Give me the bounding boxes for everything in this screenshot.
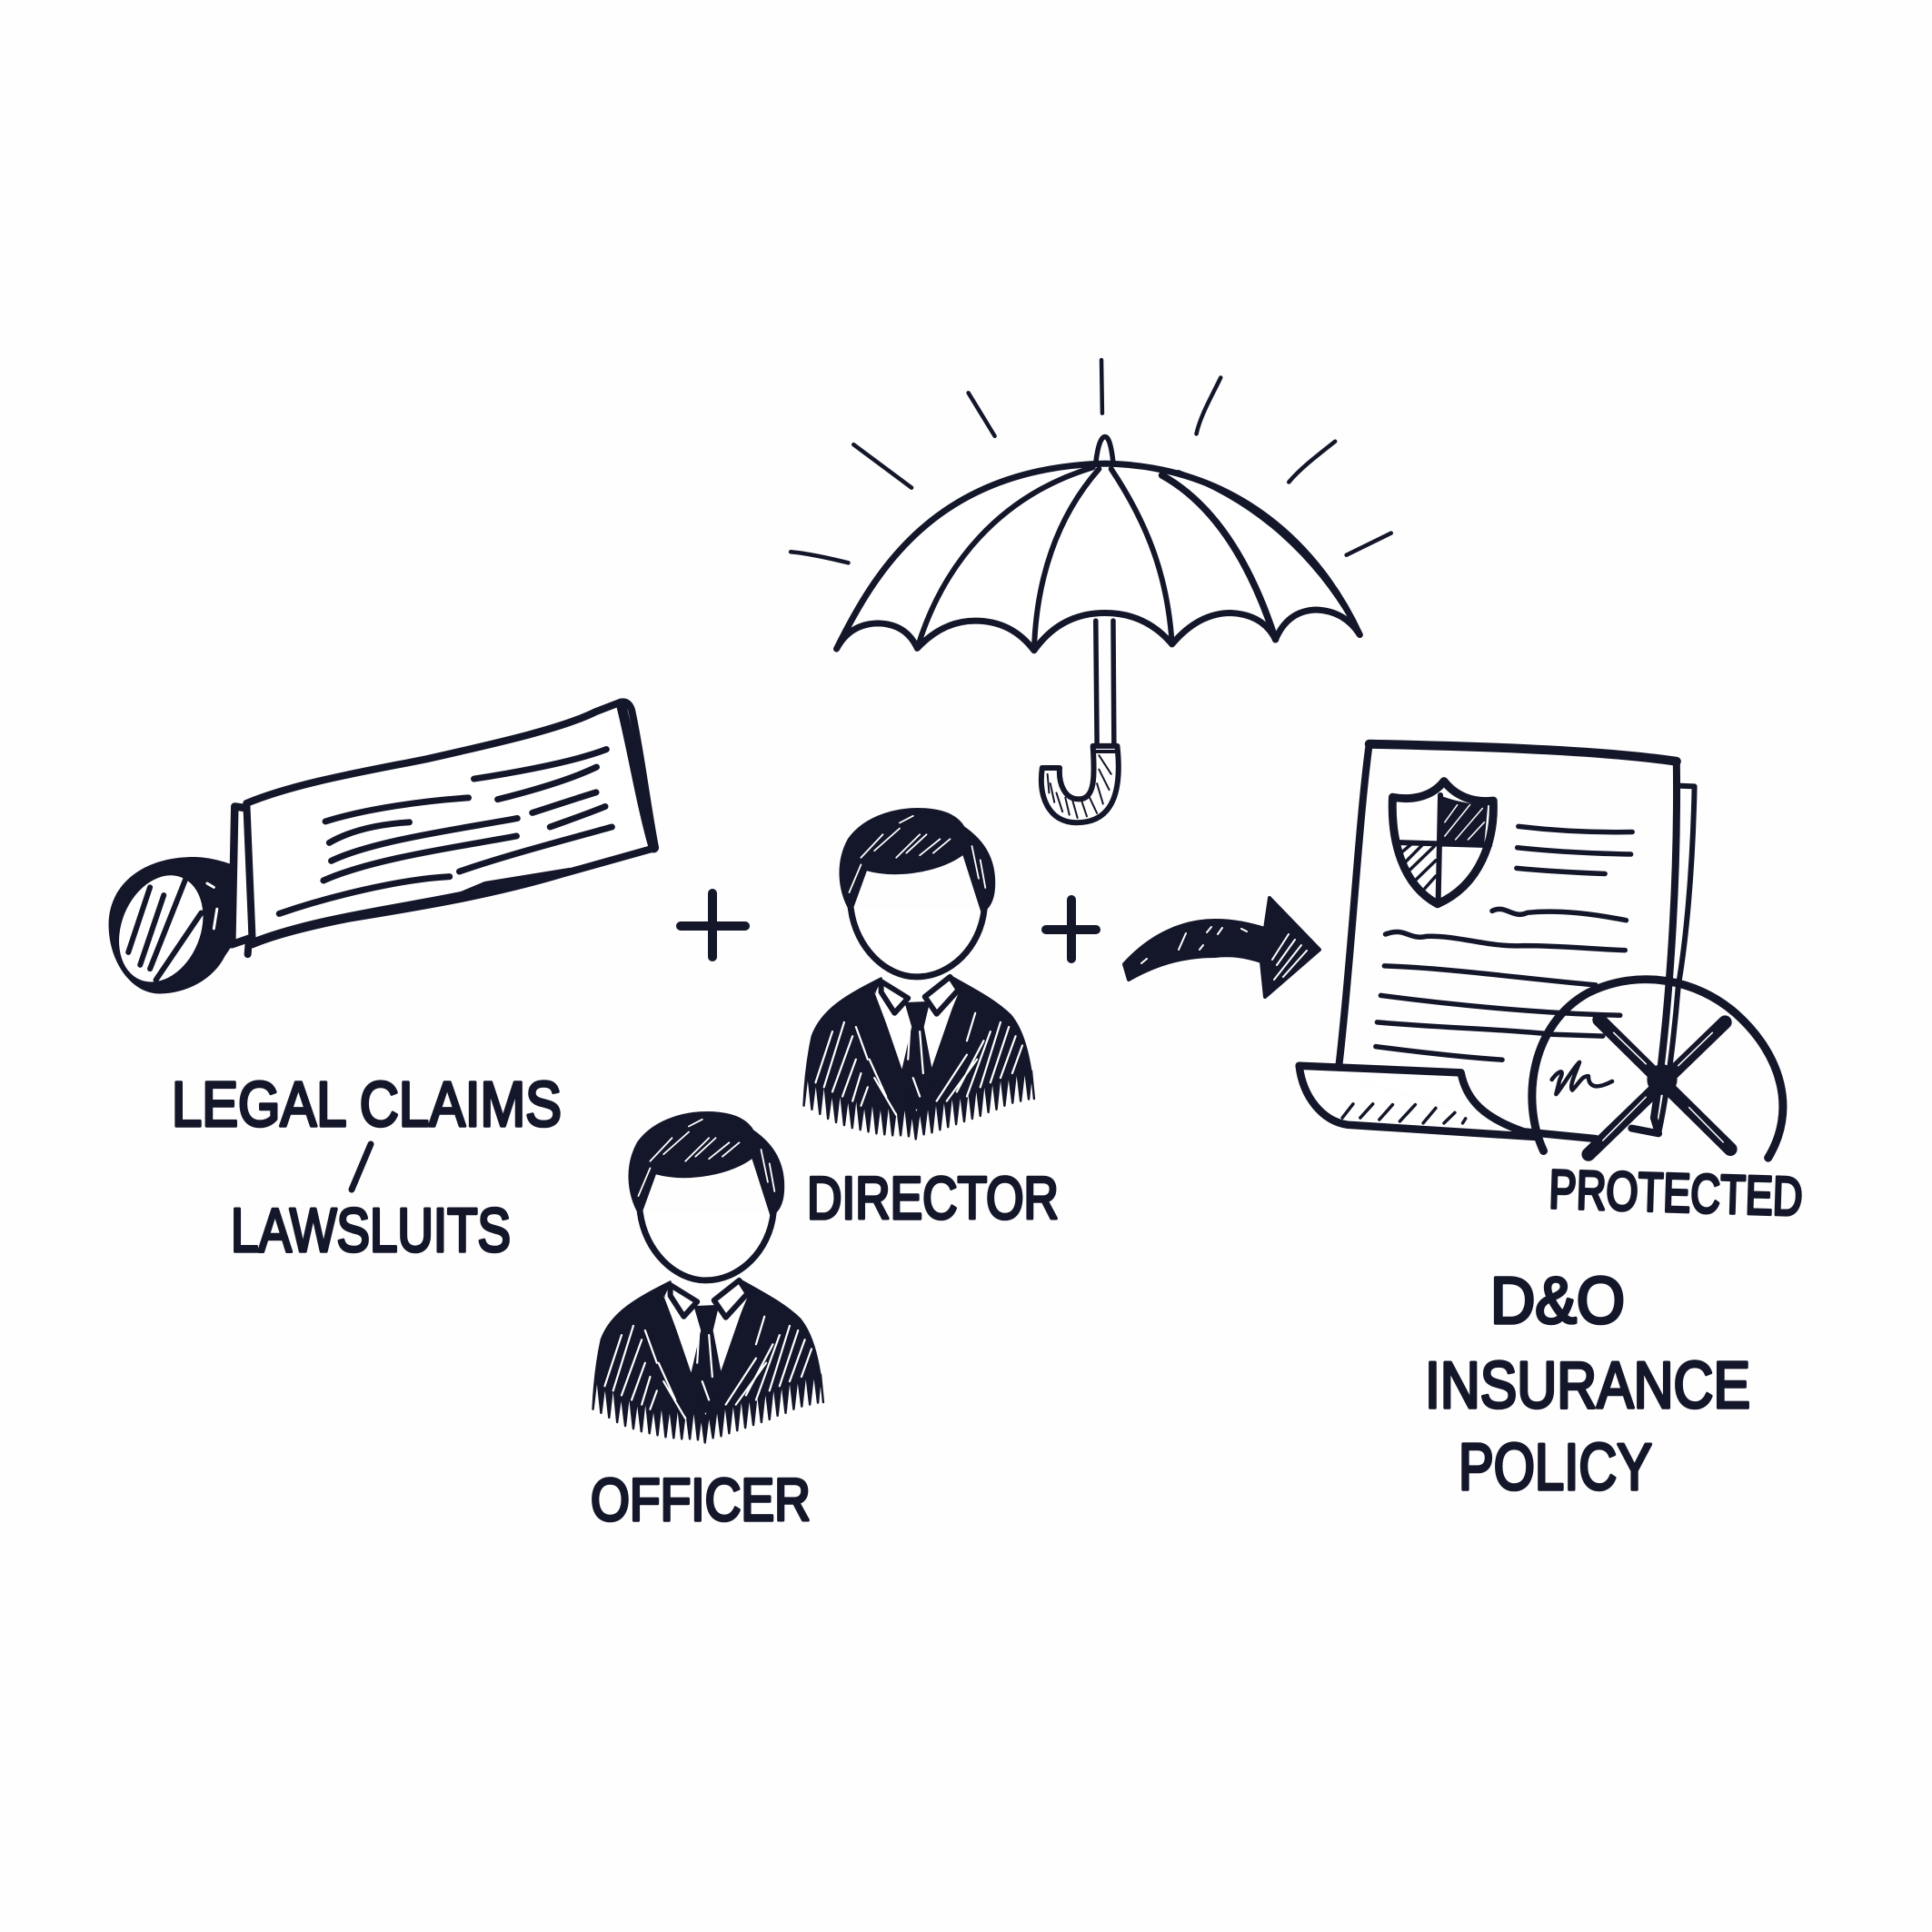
rolled paper edge [232,806,253,944]
label: director: DIRECTOR [807,1164,1059,1231]
rays [791,360,1391,563]
label: legal claims / lawsuits [172,1069,562,1265]
label: D&O insurance policy: INSURANCE [1425,1349,1750,1422]
icon: D&O policy document [1300,744,1783,1158]
paper sheet [246,702,655,944]
wax seal circle [104,857,234,994]
label: D&O insurance policy: D&O [1490,1265,1625,1338]
shield [1392,782,1493,904]
label: protected: PROTECTED [1549,1159,1804,1227]
crossed pens [1588,1020,1730,1154]
front page [1339,744,1677,1133]
shaft and handle [1041,621,1119,822]
back page [1658,786,1695,1133]
text lines on paper [279,750,612,913]
document text lines [1376,826,1632,1060]
label: D&O insurance policy: POLICY [1459,1431,1652,1504]
canopy tip [1096,437,1113,463]
icon: legal claim scroll with seal [104,702,655,994]
canopy [837,463,1359,651]
signature [1552,1062,1612,1094]
curled page foot [1300,1066,1596,1139]
icon: umbrella with rays [791,360,1391,822]
protected circle [1532,980,1783,1158]
plus sign 1 [681,893,745,957]
label: D&O insurance policy [1425,1265,1750,1504]
icon: officer figure [593,1113,823,1442]
label: officer: OFFICER [591,1466,811,1533]
canopy ribs [917,467,1172,651]
label: legal claims / lawsuits: LEGAL CLAIMS [172,1069,562,1140]
icon: director figure [804,810,1034,1139]
thick lower edge of paper [253,870,570,941]
label: legal claims / lawsuits: LAWSLUITS [231,1196,511,1265]
arrow to policy [1124,898,1320,997]
plus sign 2 [1046,900,1096,959]
